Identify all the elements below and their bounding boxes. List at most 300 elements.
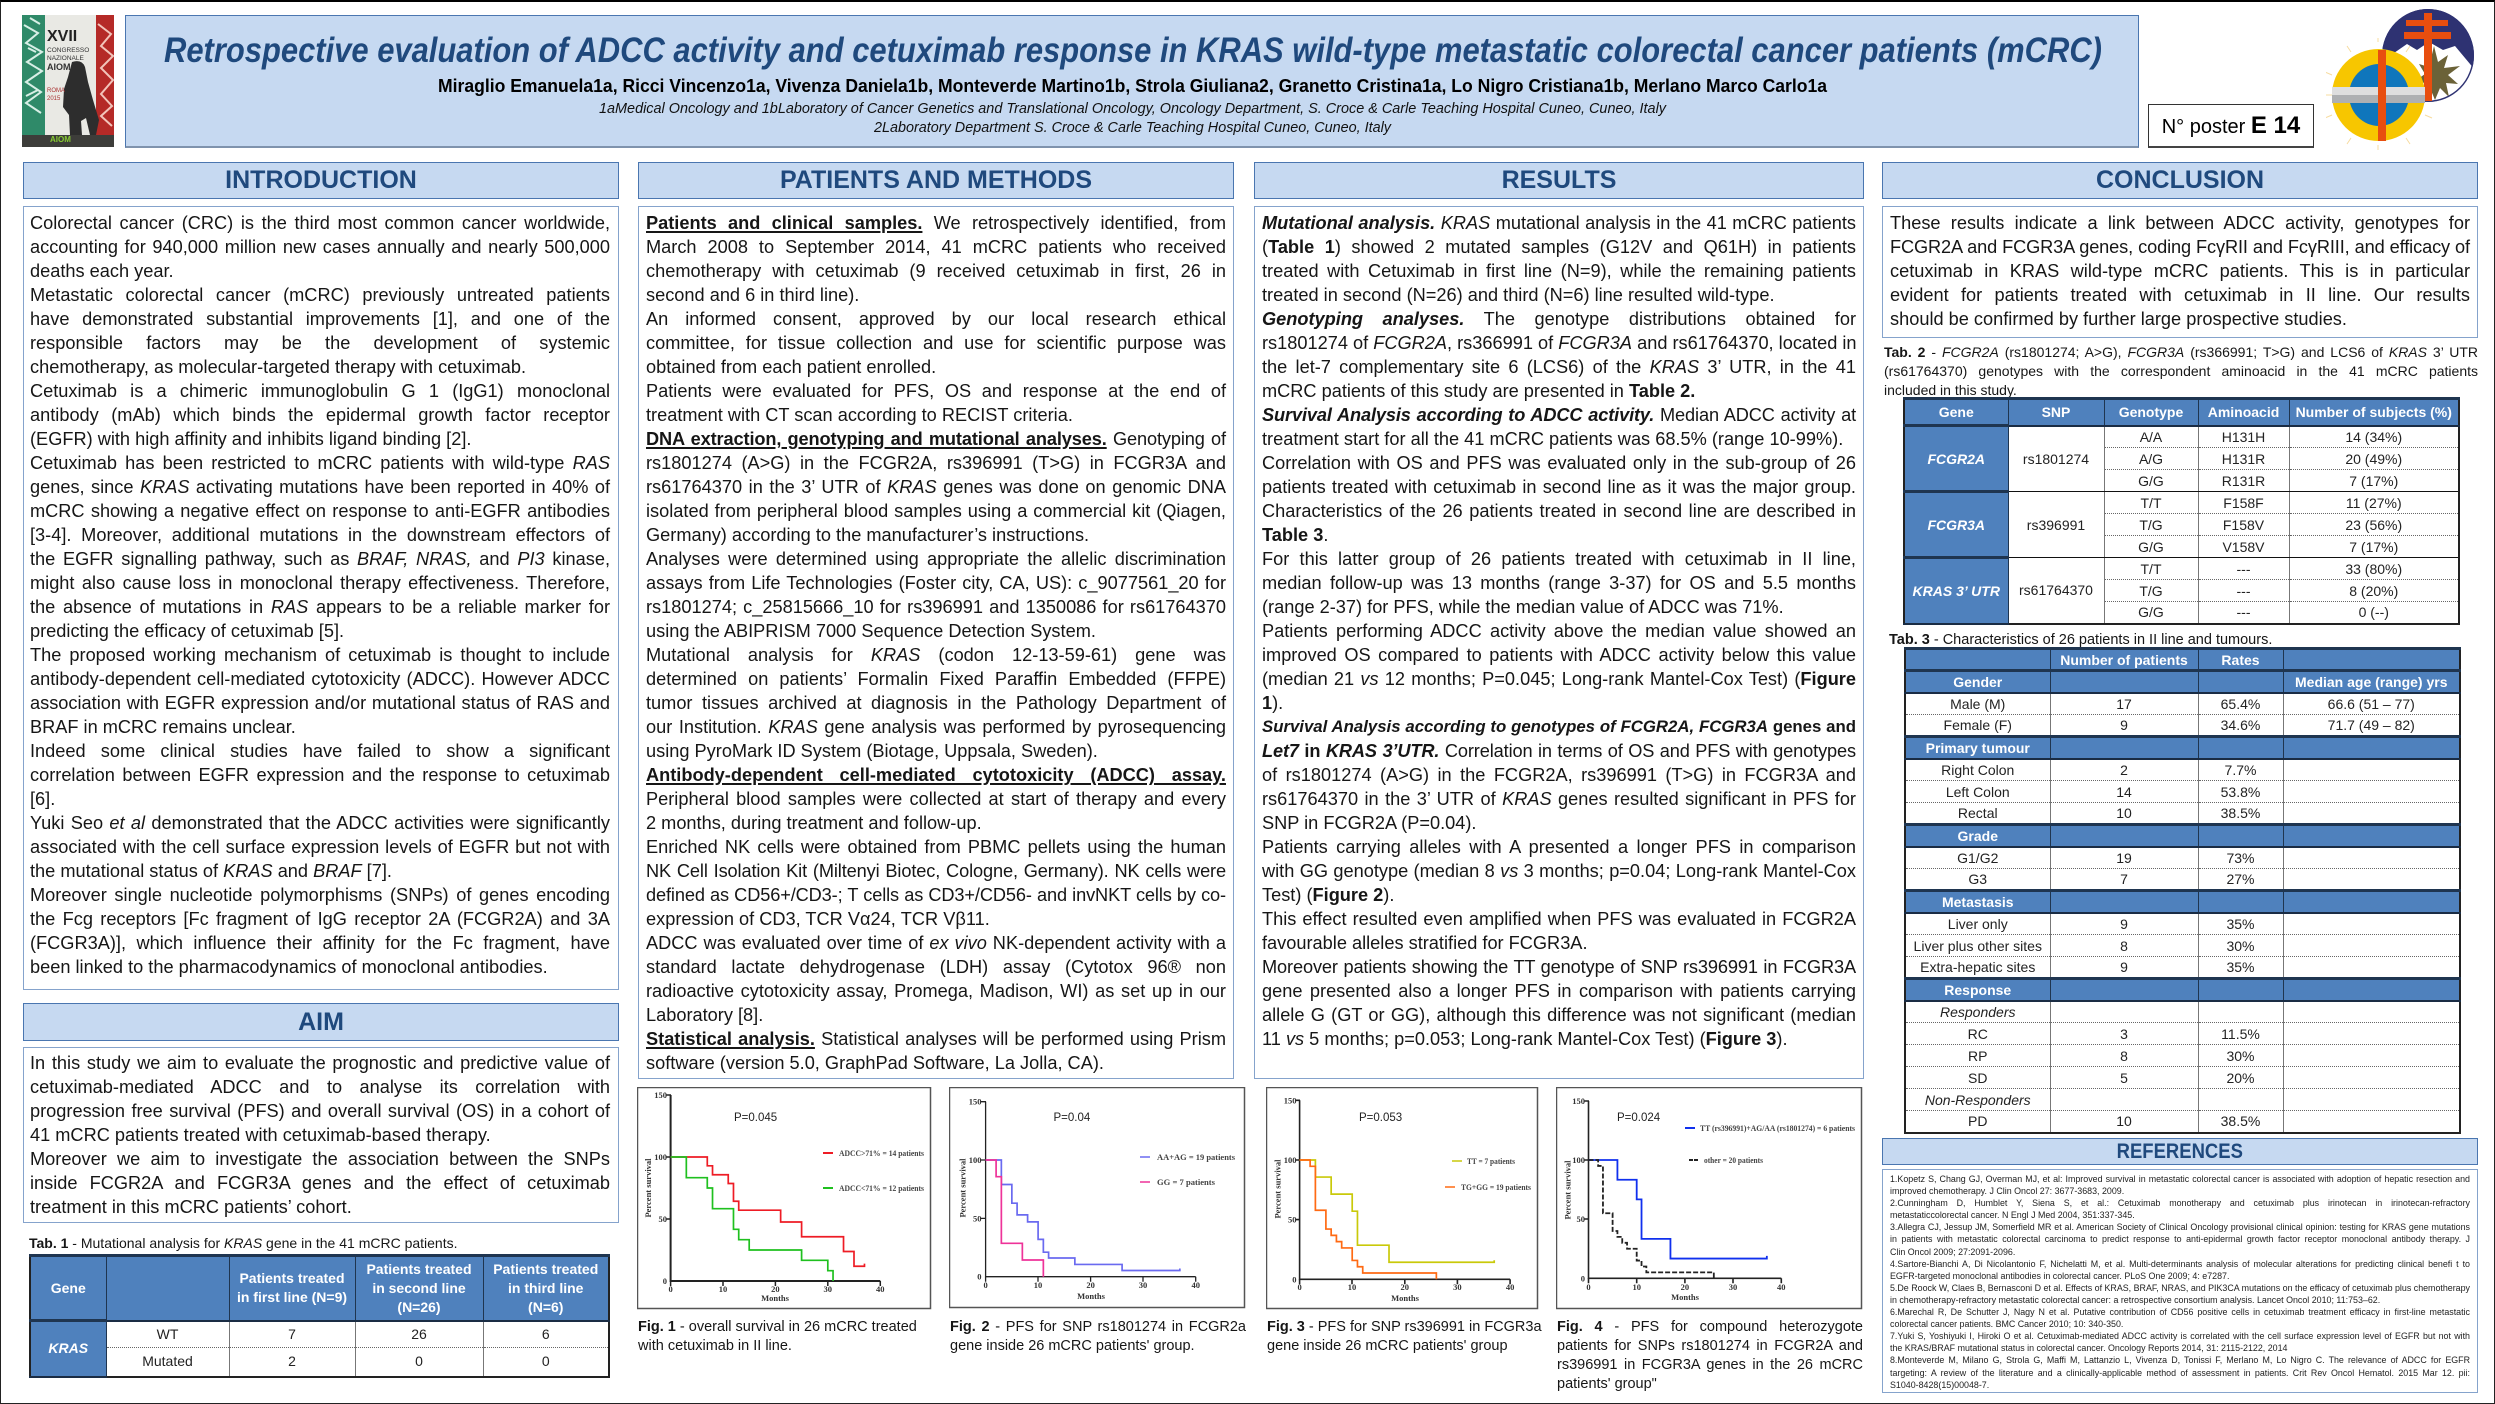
- references list: metastaticcolorectal cancer. N Engl J Med 2004, 351:337-345.: [1890, 1210, 2135, 1220]
- references list: colorectal cancer patients. BMC Cancer 2010; 10: 340-350.: [1890, 1319, 2123, 1329]
- results body text: For this latter group of 26 patients treated with cetuximab in II line,: [1262, 549, 1856, 569]
- table 2: genotypes: ---: [2236, 560, 2250, 576]
- chart: figure 4 PFS compound heterozygote: 100: [1572, 1155, 1585, 1165]
- heading: references: [1882, 1138, 2478, 1165]
- table 1: KRAS mutational analysis: 2: [288, 1353, 296, 1369]
- references list: 1.Kopetz S, Chang GJ, Overman MJ, et al: Improved survival in metastatic colorectal cancer is associated with adoption of hepatic resection and: [1890, 1174, 2470, 1184]
- conclusion body text: evident for patients treated with cetuximab in II line. Our results: [1890, 285, 2470, 305]
- results body text: improved OS compared to patients with ADCC activity below this value: [1262, 645, 1856, 665]
- table 2: genotypes: Number of subjects (%): [2296, 404, 2452, 420]
- table 3: patient characteristics: Right Colon: [1941, 762, 2014, 778]
- results body text: Survival Analysis according to ADCC activity. Median ADCC activity at: [1262, 405, 1856, 425]
- table 2: genotypes: H131H: [2222, 429, 2265, 445]
- methods body text: Antibody-dependent cell-mediated cytotoxicity (ADCC) assay.: [646, 765, 1226, 785]
- table 2: genotypes: rs396991: [2027, 516, 2085, 532]
- table 3: patient characteristics: 2: [2120, 762, 2128, 778]
- table 3: patient characteristics: 66.6 (51 – 77): [2328, 696, 2415, 712]
- introduction body text: accounting for 940,000 million new cases annually and nearly 500,000: [30, 237, 610, 257]
- congress poster thumbnail: XVII: [47, 28, 77, 45]
- chart: figure 3 PFS rs396991: Percent survival: [1272, 1159, 1282, 1219]
- methods body text: Statistical analysis. Statistical analyses will be performed using Prism: [646, 1029, 1226, 1049]
- methods body text: using the ABIPRISM 7000 Sequence Detection System.: [646, 621, 1096, 641]
- chart: figure 2 PFS rs1801274: AA+AG = 19 patients: [1157, 1153, 1235, 1162]
- conclusion body text: FCGR2A and FCGR3A genes, coding FcγRII and FcγRIII, and efficacy of: [1890, 237, 2470, 257]
- results body text: SNP in FCGR2A (P=0.04).: [1262, 813, 1476, 833]
- table 3: patient characteristics: 7.7%: [2225, 762, 2256, 778]
- chart: figure 2 PFS rs1801274: GG = 7 patients: [1157, 1178, 1215, 1187]
- results body text: rs1801274 of FCGR2A, rs366991 of FCGR3A and rs61764370, located in: [1262, 333, 1857, 353]
- table 3: patient characteristics: 9: [2120, 959, 2128, 975]
- congress poster thumbnail: [22, 15, 114, 147]
- introduction body text: Yuki Seo et al demonstrated that the ADCC activities were significantly: [30, 813, 610, 833]
- methods body text: obtained from each patient enrolled.: [646, 357, 936, 377]
- table 2: genotypes: T/G: [2139, 582, 2163, 598]
- references list: [1890, 1174, 2470, 1390]
- chart: figure 3 PFS rs396991: [1266, 1087, 1538, 1310]
- introduction body text: have demonstrated substantial improvements [1], and one of the: [30, 309, 610, 329]
- table 3: patient characteristics: Extra-hepatic sites: [1920, 959, 2035, 975]
- methods body text: committee, for tissue collection and use for scientific purpose was: [646, 333, 1226, 353]
- references list: 3.Allegra CJ, Jessup JM, Somerfield MR et al. American Society of Clinical Oncology provisional clinical opinion: testing for KRAS gene mutations: [1890, 1222, 2470, 1232]
- table 3: patient characteristics: 10: [2116, 805, 2132, 821]
- chart: figure 1 overall survival: 0: [663, 1276, 667, 1286]
- figure 3 caption: Fig. 3 - PFS for SNP rs396991 in FCGR3a: [1267, 1319, 1542, 1335]
- results body text: (median 21 vs 12 months; P=0.045; Long-rank Mantel-Cox Test) (Figure: [1262, 669, 1856, 689]
- table 3: patient characteristics: PD: [1968, 1113, 1987, 1129]
- introduction body text: Cetuximab has been restricted to mCRC patients with wild-type RAS: [30, 453, 610, 473]
- methods body text: NK Cell Isolation Kit (Miltenyi Biotec, Cologne, Germany). NK cells were: [646, 861, 1226, 881]
- introduction body text: the Fcɡ receptors [Fc fragment of IgG receptor 2A (FCGR2A) and 3A: [30, 909, 610, 929]
- introduction body text: the EGFR signalling pathway, such as BRAF, NRAS, and PI3 kinase,: [30, 549, 610, 569]
- poster number box: [2148, 104, 2314, 148]
- table 2: genotypes: 33 (80%): [2345, 560, 2402, 576]
- methods body text: using PyroMark ID System (Biotage, Uppsala, Sweden).: [646, 741, 1098, 761]
- methods body text: Mutational analysis for KRAS (codon 12-13-59-61) gene was: [646, 645, 1226, 665]
- table 3: patient characteristics: Female (F): [1944, 717, 2012, 733]
- aim body text: cetuximab-mediated ADCC and to analyse its correlation with: [30, 1077, 610, 1097]
- introduction body text: [30, 213, 610, 977]
- introduction body text: associated with the cell surface expression levels of EGFR but not with: [30, 837, 610, 857]
- methods body text: tumor tissues archived at diagnosis in the Pathology Department of: [646, 693, 1226, 713]
- methods body text: 2 months, during treatment and follow-up.: [646, 813, 982, 833]
- table 1: KRAS mutational analysis: Patients treated: [366, 1261, 472, 1277]
- chart: figure 3 PFS rs396991: TG+GG = 19 patients: [1461, 1183, 1531, 1192]
- figure 3 caption: gene inside 26 mCRC patients' group: [1267, 1338, 1508, 1354]
- chart: figure 4 PFS compound heterozygote: 10: [1632, 1282, 1641, 1292]
- table 3: patient characteristics: Primary tumour: [1926, 740, 2030, 756]
- aim body text: In this study we aim to evaluate the prognostic and predictive value of: [30, 1053, 610, 1073]
- methods body text: Analyses were determined using appropriate the allelic discrimination: [646, 549, 1226, 569]
- introduction body text: Cetuximab is a chimeric immunoglobulin G 1 (IgG1) monoclonal: [30, 381, 610, 401]
- panel: aim text: [23, 1047, 619, 1223]
- table 2: genotypes: [1903, 397, 2460, 624]
- results body text: Test) (Figure 2).: [1262, 885, 1394, 905]
- table 1: KRAS mutational analysis: 0: [542, 1353, 550, 1369]
- results body text: treated with Cetuximab in first line (N=9), while the remaining patients: [1262, 261, 1856, 281]
- results body text: mCRC patients of this study are presented in Table 2.: [1262, 381, 1695, 401]
- aim body text: inside FCGR2A and FCGR3A genes and the effect of cetuximab: [30, 1173, 610, 1193]
- figure 2 caption: Fig. 2 - PFS for SNP rs1801274 in FCGR2a: [950, 1319, 1246, 1335]
- table 3: patient characteristics: G1/G2: [1957, 850, 1998, 866]
- heading: patients and methods: PATIENTS AND METHODS: [780, 166, 1092, 194]
- chart: figure 2 PFS rs1801274: 100: [969, 1155, 982, 1165]
- figure 4 caption: patients for SNPs rs1801274 in FCGR2A and: [1557, 1338, 1863, 1354]
- table 3: patient characteristics: 30%: [2226, 1048, 2255, 1064]
- references list: in patients with metastatic colorectal carcinoma to predict response to anti-epidermal growth factor receptor monoclonal antibody therapy. J: [1890, 1234, 2470, 1244]
- references list: 8.Monteverde M, Milano G, Strola G, Maffi M, Lattanzio L, Vivenza D, Tonissi F, Merlano M, Lo Nigro C. The relevance of ADCC for EGFR: [1890, 1355, 2470, 1365]
- references list: S1040-8428(15)00048-7.: [1890, 1380, 1989, 1390]
- results body text: 11 vs 5 months; p=0.053; Long-rank Mantel-Cox Test) (Figure 3).: [1262, 1029, 1788, 1049]
- introduction body text: [6].: [30, 789, 55, 809]
- table 1 caption: Tab. 1 - Mutational analysis for KRAS gene in the 41 mCRC patients.: [29, 1235, 458, 1251]
- congress poster thumbnail: AIOM: [47, 62, 70, 72]
- table 3: patient characteristics: RP: [1968, 1048, 1987, 1064]
- chart: figure 3 PFS rs396991: 0: [1292, 1274, 1296, 1284]
- chart: figure 2 PFS rs1801274: P=0.04: [1054, 1112, 1091, 1124]
- chart: figure 1 overall survival: 0: [668, 1284, 673, 1294]
- chart: figure 2 PFS rs1801274: 50: [973, 1213, 982, 1223]
- heading: aim: [23, 1003, 619, 1041]
- methods body text: defined as CD56+/CD3-; T cells as CD3+/CD56- and invNKT cells by co-: [646, 885, 1226, 905]
- table 2: genotypes: T/T: [2140, 494, 2162, 510]
- table 3: patient characteristics: Male (M): [1950, 696, 2005, 712]
- poster number box: N° poster E 14: [2162, 112, 2300, 139]
- table 1: KRAS mutational analysis: [29, 1254, 610, 1378]
- table 3: patient characteristics: 19: [2116, 850, 2132, 866]
- aim body text: treatment in this mCRC patients’ cohort.: [30, 1197, 352, 1217]
- table 2: genotypes: F158V: [2223, 516, 2264, 532]
- table 2: genotypes: Gene: [1939, 404, 1974, 420]
- methods body text: expression of CD3, TCR Vα24, TCR Vβ11.: [646, 909, 990, 929]
- heading: conclusion: CONCLUSION: [2096, 166, 2264, 194]
- figure 4 caption: Fig. 4 - PFS for compound heterozygote: [1557, 1319, 1863, 1335]
- main title: [164, 31, 2102, 136]
- methods body text: standard lactate dehydrogenase (LDH) assay (Cytotox 96® non: [646, 957, 1226, 977]
- table 2: genotypes: 20 (49%): [2345, 450, 2402, 466]
- table 3: patient characteristics: Non-Responders: [1925, 1092, 2031, 1108]
- results body text: Patients performing ADCC activity above the median value showed an: [1262, 621, 1856, 641]
- figure 1 caption: Fig. 1 - overall survival in 26 mCRC treated: [638, 1319, 917, 1335]
- introduction body text: correlation between EGFR expression and the response to cetuximab: [30, 765, 610, 785]
- table 1: KRAS mutational analysis: 7: [288, 1326, 296, 1342]
- results body text: (Table 1) showed 2 mutated samples (G12V and Q61H) in patients: [1262, 237, 1856, 257]
- table 1: KRAS mutational analysis: Patients treated: [239, 1270, 345, 1286]
- chart: figure 1 overall survival: 30: [824, 1284, 832, 1294]
- results body text: with GG genotype (median 8 vs 3 months; p=0.04; Long-rank Mantel-Cox: [1262, 861, 1856, 881]
- aim body text: 41 mCRC patients treated with cetuximab-based therapy.: [30, 1125, 491, 1145]
- results body text: Table 3.: [1262, 525, 1328, 545]
- table 3: patient characteristics: 38.5%: [2221, 805, 2260, 821]
- results body text: gene presented also a longer PFS in comparison with patients carrying: [1262, 981, 1856, 1001]
- table 1: KRAS mutational analysis: 6: [542, 1326, 550, 1342]
- table 2: genotypes: 8 (20%): [2349, 582, 2398, 598]
- chart: figure 2 PFS rs1801274: Percent survival: [958, 1158, 968, 1218]
- chart: figure 4 PFS compound heterozygote: 50: [1576, 1214, 1585, 1224]
- introduction body text: chemotherapy, as molecular-targeted therapy with cetuximab.: [30, 357, 526, 377]
- table 2 caption: (rs61764370) genotypes with the correspondent aminoacid in the 41 mCRC patients: [1884, 363, 2478, 379]
- table 3: patient characteristics: [1904, 647, 2461, 1134]
- results body text: Let7 in KRAS 3’UTR. Correlation in terms of OS and PFS with genotypes: [1262, 741, 1856, 761]
- table 3: patient characteristics: 20%: [2226, 1070, 2255, 1086]
- chart: figure 1 overall survival: ADCC<71% = 12 patients: [839, 1184, 924, 1193]
- references list: targeting: A review of the literature and a clinically-applicable method of assessment in patients. Crit Rev Oncol Hematol. 2015 Mar 12. pii:: [1890, 1368, 2470, 1378]
- methods body text: Enriched NK cells were obtained from PBMC pellets using the human: [646, 837, 1226, 857]
- introduction body text: antibody-dependent cell-mediated cytotoxicity (ADCC). However ADCC: [30, 669, 610, 689]
- table 3: patient characteristics: 27%: [2226, 871, 2255, 887]
- introduction body text: predicting the efficacy of cetuximab [5].: [30, 621, 344, 641]
- table 3: patient characteristics: Rectal: [1958, 805, 1998, 821]
- methods body text: our Institution. KRAS gene analysis was performed by pyrosequencing: [646, 717, 1226, 737]
- table 2 caption: Tab. 2 - FCGR2A (rs1801274; A>G), FCGR3A (rs366991; T>G) and LCS6 of KRAS 3’ UTR: [1884, 344, 2478, 360]
- table 3: patient characteristics: 71.7 (49 – 82): [2328, 717, 2415, 733]
- main title: 2Laboratory Department S. Croce & Carle Teaching Hospital Cuneo, Cuneo, Italy: [873, 120, 1392, 136]
- figure 1 caption: with cetuximab in II line.: [638, 1338, 792, 1354]
- panel: references: [1882, 1169, 2478, 1393]
- chart: figure 2 PFS rs1801274: 0: [983, 1280, 988, 1290]
- chart: figure 3 PFS rs396991: 150: [1284, 1095, 1296, 1105]
- table 2 caption: included in this study.: [1884, 382, 2017, 398]
- chart: figure 1 overall survival: 150: [654, 1090, 667, 1100]
- table 1: KRAS mutational analysis: Patients treated: [493, 1261, 598, 1277]
- chart: figure 4 PFS compound heterozygote: other = 20 patients: [1704, 1156, 1763, 1165]
- introduction body text: Metastatic colorectal cancer (mCRC) previously untreated patients: [30, 285, 610, 305]
- results body text: allele G (GT or GG), although this difference was not significant (median: [1262, 1005, 1856, 1025]
- methods body text: Peripheral blood samples were collected at start of therapy and every: [646, 789, 1226, 809]
- references list: 7.Yuki S, Yoshiyuki I, Hiroki O et al. Cetuximab-mediated ADCC activity is correlated with the cell surface expression level of EGFR but not with: [1890, 1331, 2470, 1341]
- table 3: patient characteristics: 9: [2120, 916, 2128, 932]
- figure 3 caption: [1267, 1319, 1542, 1354]
- introduction body text: antibody (mAb) which binds the epidermal growth factor receptor: [30, 405, 610, 425]
- table 1: KRAS mutational analysis: in third line: [508, 1280, 583, 1296]
- table 3: patient characteristics: 14: [2116, 784, 2132, 800]
- table 3: patient characteristics: 5: [2120, 1070, 2128, 1086]
- references list: 6.Marechal R, De Schutter J, Nagy N et al. Putative contribution of CD56 positive cells in cetuximab treatment efficacy in first-line metastatic: [1890, 1307, 2470, 1317]
- chart: figure 1 overall survival: 20: [771, 1284, 780, 1294]
- table 3: patient characteristics: Response: [1944, 982, 2011, 998]
- chart: figure 4 PFS compound heterozygote: 150: [1572, 1096, 1585, 1106]
- table 2: genotypes: A/A: [2140, 429, 2162, 445]
- table 1: KRAS mutational analysis: Gene: [51, 1280, 86, 1296]
- methods body text: Patients were evaluated for PFS, OS and response at the end of: [646, 381, 1226, 401]
- references list: 5.De Roock W, Claes B, Bernasconi D et al. Effects of KRAS, BRAF, NRAS, and PIK3CA mutations on the efficacy of cetuximab plus chemotherapy: [1890, 1283, 2470, 1293]
- introduction body text: might also cause loss in monoclonal therapy effectiveness. Therefore,: [30, 573, 610, 593]
- conclusion body text: cetuximab in KRAS wild-type mCRC patients. This is in particular: [1890, 261, 2470, 281]
- references list: improved chemotherapy. J Clin Oncol 27: 3677-3683, 2009.: [1890, 1186, 2124, 1196]
- table 2: genotypes: G/G: [2138, 604, 2164, 620]
- introduction body text: Moreover single nucleotide polymorphisms (SNPs) of genes encoding: [30, 885, 610, 905]
- results body text: Characteristics of the 26 patients treated in second line are described in: [1262, 501, 1856, 521]
- figure 1 caption: [638, 1319, 917, 1354]
- figure 4 caption: rs396991 in FCGR3A genes in the 26 mCRC: [1557, 1357, 1863, 1373]
- introduction body text: the absence of mutations in RAS appears to be a reliable marker for: [30, 597, 610, 617]
- chart: figure 4 PFS compound heterozygote: P=0.024: [1617, 1112, 1661, 1124]
- chart: figure 1 overall survival: ADCC>71% = 14 patients: [839, 1149, 924, 1158]
- chart: figure 2 PFS rs1801274: 20: [1086, 1280, 1095, 1290]
- conclusion body text: These results indicate a link between ADCC activity, genotypes for: [1890, 213, 2470, 233]
- congress poster thumbnail: NAZIONALE: [47, 55, 85, 62]
- table 1: KRAS mutational analysis: 26: [411, 1326, 427, 1342]
- heading: results: [1254, 162, 1864, 199]
- introduction body text: responsible factors may be the development of systemic: [30, 333, 610, 353]
- methods body text: assays from Life Technologies (Foster city, CA, US): c_9077561_20 for: [646, 573, 1226, 593]
- table 2: genotypes: rs1801274: [2023, 451, 2089, 467]
- table 2: genotypes: ---: [2236, 604, 2250, 620]
- conclusion body text: [1890, 213, 2470, 329]
- introduction body text: (FCGR3A)], which influence their affinity for the Fc fragment, have: [30, 933, 610, 953]
- table 2: genotypes: 14 (34%): [2345, 429, 2402, 445]
- main title: Miraglio Emanuela1a, Ricci Vincenzo1a, Vivenza Daniela1b, Monteverde Martino1b, Strola Giuliana2, Granetto Cristina1a, Lo Nigro Cristiana1b, Merlano Marco Carlo1a: [438, 75, 1828, 96]
- table 3: patient characteristics: 3: [2120, 1026, 2128, 1042]
- table 3: patient characteristics: 30%: [2226, 938, 2255, 954]
- chart: figure 4 PFS compound heterozygote: 40: [1777, 1282, 1786, 1292]
- methods body text: ADCC was evaluated over time of ex vivo NK-dependent activity with a: [646, 933, 1226, 953]
- methods body text: rs61764370 in the 3’ UTR of KRAS genes was done on genomic DNA: [646, 477, 1226, 497]
- table 2: genotypes: 0 (--): [2359, 604, 2389, 620]
- table 2: genotypes: G/G: [2138, 538, 2164, 554]
- table 1: KRAS mutational analysis: 0: [415, 1353, 423, 1369]
- table 3: patient characteristics: Number of patients: [2060, 652, 2188, 668]
- table 3: patient characteristics: 34.6%: [2221, 717, 2260, 733]
- chart: figure 2 PFS rs1801274: 0: [977, 1272, 982, 1282]
- chart: figure 3 PFS rs396991: 100: [1284, 1155, 1296, 1165]
- results body text: favourable alleles stratified for FCGR3A.: [1262, 933, 1588, 953]
- table 2: genotypes: G/G: [2138, 472, 2164, 488]
- introduction body text: the mutational status of KRAS and BRAF [7].: [30, 861, 392, 881]
- chart: figure 2 PFS rs1801274: 40: [1191, 1280, 1200, 1290]
- heading: patients and methods: [638, 162, 1234, 199]
- table 1: KRAS mutational analysis: in second line: [372, 1280, 466, 1296]
- chart: figure 1 overall survival: P=0.045: [734, 1112, 777, 1124]
- methods body text: determined on patients’ Formalin Fixed Paraffin Embedded (FFPE): [646, 669, 1226, 689]
- congress poster thumbnail: CONGRESSO: [47, 47, 89, 54]
- introduction body text: (EGFR) with high affinity and inhibits ligand binding [2].: [30, 429, 471, 449]
- table 3: patient characteristics: Gender: [1953, 674, 2002, 690]
- table 2: genotypes: T/G: [2139, 516, 2163, 532]
- table 1: KRAS mutational analysis: in first line (N=9): [237, 1289, 347, 1305]
- introduction body text: deaths each year.: [30, 261, 174, 281]
- chart: figure 1 overall survival: 40: [876, 1284, 885, 1294]
- introduction body text: association with EGFR expression and/or mutational status of RAS and: [30, 693, 610, 713]
- chart: figure 3 PFS rs396991: 40: [1506, 1282, 1514, 1292]
- panel: patients and methods text: [638, 206, 1234, 1079]
- table 3: patient characteristics: 8: [2120, 1048, 2128, 1064]
- results body text: Patients carrying alleles with A presented a longer PFS in comparison: [1262, 837, 1856, 857]
- table 3: patient characteristics: 8: [2120, 938, 2128, 954]
- chart: figure 4 PFS compound heterozygote: Percent survival: [1562, 1160, 1572, 1220]
- chart: figure 1 overall survival: 50: [658, 1214, 667, 1224]
- results body text: patients treated with cetuximab in second line as it was the major group.: [1262, 477, 1856, 497]
- table 2: genotypes: 7 (17%): [2349, 472, 2398, 488]
- results body text: Correlation with OS and PFS was evaluated only in the sub-group of 26: [1262, 453, 1856, 473]
- table 2: genotypes: FCGR2A: [1927, 450, 1985, 466]
- methods body text: Laboratory [8].: [646, 1005, 763, 1025]
- table 2: genotypes: V158V: [2222, 538, 2265, 554]
- chart: figure 2 PFS rs1801274: 10: [1034, 1280, 1042, 1290]
- chart: figure 2 PFS rs1801274: 150: [969, 1097, 982, 1107]
- results body text: median follow-up was 13 months (range 3-37) for OS and 5.5 months: [1262, 573, 1856, 593]
- heading: results: RESULTS: [1502, 166, 1616, 194]
- results body text: Mutational analysis. KRAS mutational analysis in the 41 mCRC patients: [1262, 213, 1856, 233]
- table 3: patient characteristics: Responders: [1940, 1004, 2016, 1020]
- introduction body text: Colorectal cancer (CRC) is the third most common cancer worldwide,: [30, 213, 610, 233]
- conclusion body text: should be confirmed by further large prospective studies.: [1890, 309, 2347, 329]
- table 2: genotypes: 11 (27%): [2346, 494, 2402, 510]
- table 3: patient characteristics: Left Colon: [1946, 784, 2010, 800]
- results body text: This effect resulted even amplified when PFS was evaluated in FCGR2A: [1262, 909, 1856, 929]
- table 3: patient characteristics: 35%: [2226, 916, 2255, 932]
- panel: introduction text: [23, 206, 619, 990]
- methods body text: March 2008 to September 2014, 41 mCRC patients who received: [646, 237, 1226, 257]
- methods body text: second and 6 in third line).: [646, 285, 859, 305]
- chart: figure 3 PFS rs396991: 30: [1453, 1282, 1462, 1292]
- icon: society logos: [2326, 9, 2474, 150]
- table 3: patient characteristics: 10: [2116, 1113, 2132, 1129]
- table 3: patient characteristics: Grade: [1958, 828, 1998, 844]
- table 3: patient characteristics: 38.5%: [2221, 1113, 2260, 1129]
- introduction body text: Indeed some clinical studies have failed to show a significant: [30, 741, 610, 761]
- chart: figure 4 PFS compound heterozygote: 0: [1586, 1282, 1591, 1292]
- references list: 4.Sartore-Bianchi A, Di Nicolantonio F, Nichelatti M, et al. Multi-determinants analysis of molecular alterations for predicting clinical benefi t to: [1890, 1259, 2470, 1269]
- chart: figure 4 PFS compound heterozygote: Months: [1671, 1292, 1700, 1302]
- chart: figure 3 PFS rs396991: P=0.053: [1359, 1112, 1402, 1124]
- methods body text: [646, 213, 1226, 1073]
- table 2: genotypes: F158F: [2223, 494, 2264, 510]
- table 1: KRAS mutational analysis: KRAS: [48, 1340, 88, 1356]
- table 3: patient characteristics: RC: [1968, 1026, 1988, 1042]
- heading: introduction: [23, 162, 619, 199]
- heading: references: REFERENCES: [2117, 1140, 2243, 1163]
- results body text: [1262, 213, 1857, 1049]
- introduction body text: genes, since KRAS activating mutations have been reported in 40% of: [30, 477, 610, 497]
- chart: figure 4 PFS compound heterozygote: 30: [1729, 1282, 1737, 1292]
- congress poster thumbnail: 2015: [47, 96, 61, 102]
- chart: figure 1 overall survival: 100: [654, 1152, 667, 1162]
- methods body text: Patients and clinical samples. We retrospectively identified, from: [646, 213, 1226, 233]
- methods body text: treatment with CT scan according to RECIST criteria.: [646, 405, 1073, 425]
- chart: figure 1 overall survival: Percent survival: [643, 1158, 653, 1218]
- table 3: patient characteristics: Liver plus other sites: [1914, 938, 2042, 954]
- results body text: of rs1801274 (A>G) in the FCGR2A, rs396991 (T>G) in FCGR3A and: [1262, 765, 1856, 785]
- introduction body text: BRAF in mCRC remains unclear.: [30, 717, 296, 737]
- references list: 2.Cunningham D, Humblet Y, Siena S, et al.: Cetuximab monotherapy and cetuximab plus irinotecan in irinotecan-refractory: [1890, 1198, 2470, 1208]
- methods body text: chemotherapy with cetuximab (9 received cetuximab in first, 26 in: [646, 261, 1226, 281]
- chart: figure 4 PFS compound heterozygote: 0: [1581, 1273, 1585, 1283]
- references list: the KRAS/BRAF mutational status in colorectal cancer. Oncology Reports 2014, 31: 2115-2122, 2014: [1890, 1343, 2287, 1353]
- methods body text: An informed consent, approved by our local research ethical: [646, 309, 1226, 329]
- table 3: patient characteristics: 9: [2120, 717, 2128, 733]
- methods body text: radioactive cytotoxicity assay, Promega, Madison, WI) as set up in our: [646, 981, 1226, 1001]
- introduction body text: been linked to the pharmacodynamics of monoclonal antibodies.: [30, 957, 548, 977]
- results body text: treatment start for all the 41 mCRC patients was 68.5% (range 10-99%).: [1262, 429, 1843, 449]
- table 3: patient characteristics: SD: [1968, 1070, 1987, 1086]
- introduction body text: [3-4]. Moreover, additional mutations in the downstream effectors of: [30, 525, 610, 545]
- aim body text: progression free survival (PFS) and overall survival (OS) in a cohort of: [30, 1101, 610, 1121]
- table 1: KRAS mutational analysis: (N=26): [397, 1299, 441, 1315]
- chart: figure 4 PFS compound heterozygote: 20: [1681, 1282, 1689, 1292]
- figure 4 caption: [1557, 1319, 1863, 1392]
- chart: figure 2 PFS rs1801274: 30: [1139, 1280, 1147, 1290]
- methods body text: rs1801274; c_25815666_10 for rs396991 and 1350086 for rs61764370: [646, 597, 1226, 617]
- heading: conclusion: [1882, 162, 2478, 199]
- table 2: genotypes: 7 (17%): [2349, 538, 2398, 554]
- panel: results text: [1254, 206, 1864, 1079]
- methods body text: software (version 5.0, GraphPad Software, La Jolla, CA).: [646, 1053, 1104, 1073]
- figure 2 caption: [950, 1319, 1246, 1354]
- results body text: rs61764370 in the 3’ UTR of KRAS genes resulted significant in PFS for: [1262, 789, 1856, 809]
- congress poster thumbnail: AIOM: [50, 135, 71, 144]
- chart: figure 3 PFS rs396991: 20: [1401, 1282, 1409, 1292]
- results body text: Genotyping analyses. The genotype distributions obtained for: [1262, 309, 1856, 329]
